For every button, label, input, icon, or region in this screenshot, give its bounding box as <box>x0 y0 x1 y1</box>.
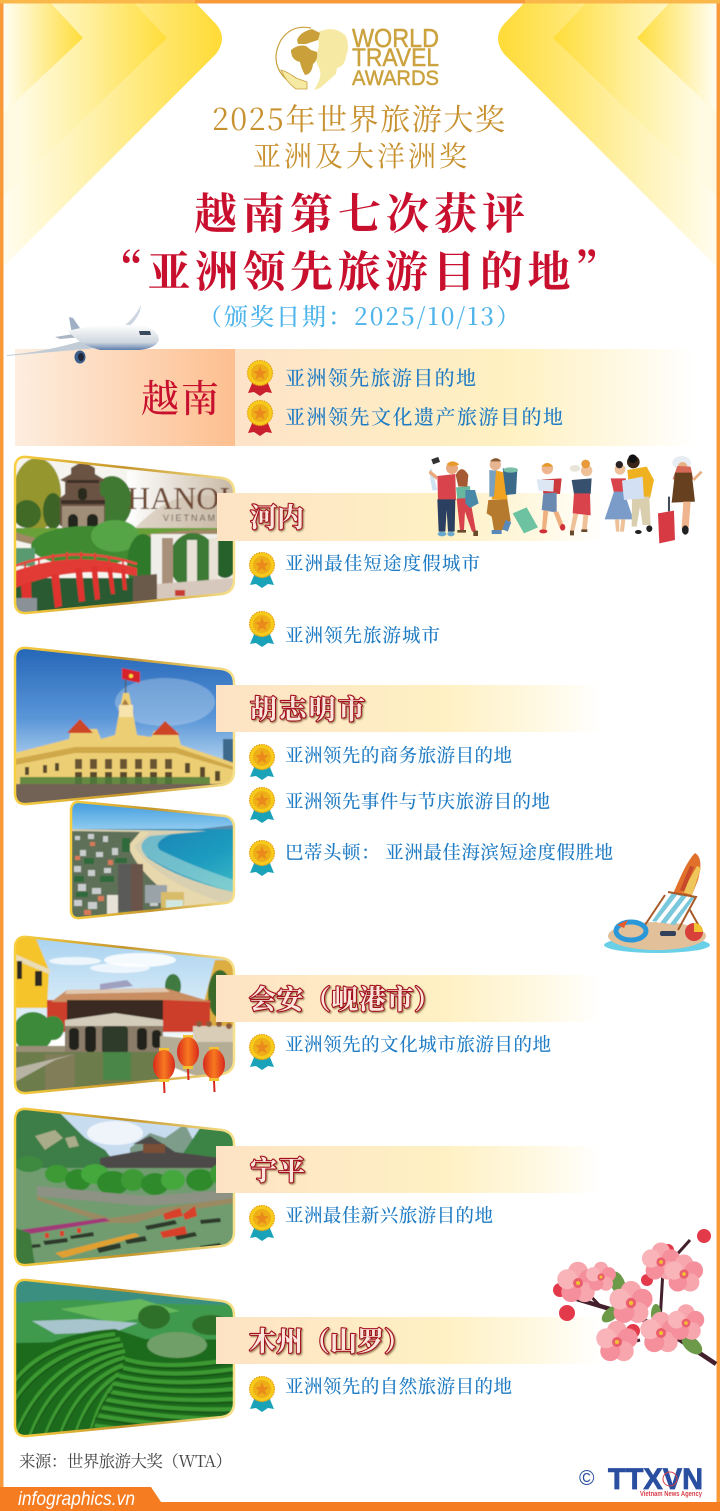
photo: Ninh Binh <box>15 1108 234 1266</box>
Vietnam label background <box>15 349 235 446</box>
Vietnam label: 越南 <box>141 368 219 423</box>
title line 1: 越南第七次获评 <box>194 181 525 242</box>
medal: red 2 <box>248 400 272 436</box>
logo: World Travel Awards: AWARDS <box>352 67 439 90</box>
title line 2: “亚洲领先旅游目的地” <box>100 239 618 300</box>
panel: Vietnam <box>15 349 695 446</box>
medal: red 1 <box>248 360 272 396</box>
medal: Hanoi 2 <box>250 612 274 647</box>
medal: Ninh Binh <box>250 1206 274 1241</box>
award: Hanoi 2: 亚洲领先旅游城市 <box>285 622 440 648</box>
illustration: beach chair and surfboard <box>604 853 710 953</box>
photo: Ho Chi Minh City Hall <box>15 647 234 806</box>
city name: Moc Chau (Son La): 木州（山罗） <box>249 1320 411 1359</box>
logo: TTXVN: TTXVN <box>608 1463 703 1496</box>
logo: World Travel Awards: TRAVEL <box>352 44 439 72</box>
award: Ninh Binh: 亚洲最佳新兴旅游目的地 <box>285 1202 493 1228</box>
footer bar <box>0 1487 720 1511</box>
photo: Hanoi: VIETNAM <box>163 513 217 523</box>
heading: award region: 亚洲及大洋洲奖 <box>253 135 467 175</box>
medal: HCMC 2 <box>250 788 274 823</box>
award: Moc Chau: 亚洲领先的自然旅游目的地 <box>285 1373 512 1399</box>
logo: TTXVN: © <box>579 1467 595 1490</box>
award: Hoi An: 亚洲领先的文化城市旅游目的地 <box>285 1031 551 1057</box>
decorative chevrons: top left <box>3 0 222 267</box>
city name: Ho Chi Minh City: 胡志明市 <box>250 688 365 727</box>
award date: （颁奖日期：2025/10/13） <box>198 297 520 332</box>
source note: 来源：世界旅游大奖（WTA） <box>19 1448 232 1472</box>
photo: Vung Tau beach <box>71 800 236 920</box>
icon: lanterns <box>153 1035 225 1093</box>
medal: Moc Chau <box>250 1376 274 1412</box>
photo: Moc Chau tea hills <box>10 1279 234 1449</box>
award: Asia's leading heritage destination: 亚洲领先文化遗产旅游目的地 <box>285 401 563 430</box>
city band: Ninh Binh <box>216 1146 601 1193</box>
city band: Ho Chi Minh City <box>216 685 601 732</box>
award: Vung Tau: 巴蒂头顿： 亚洲最佳海滨短途度假胜地 <box>285 839 613 865</box>
award: Hanoi 1: 亚洲最佳短途度假城市 <box>285 550 480 576</box>
medal: Vung Tau <box>250 840 274 876</box>
photo: Hanoi: HANOI <box>127 480 230 516</box>
illustration: group of tourists <box>429 454 702 543</box>
medal: Hoi An <box>250 1034 274 1070</box>
Vietnam awards background <box>235 349 695 446</box>
icon: airplane <box>7 305 159 364</box>
medal: Hanoi 1 <box>250 552 274 588</box>
award: HCMC 2: 亚洲领先事件与节庆旅游目的地 <box>285 788 550 814</box>
award: HCMC 1: 亚洲领先的商务旅游目的地 <box>285 742 512 768</box>
medal: HCMC 1 <box>250 744 274 780</box>
illustration: peach blossoms <box>553 1229 716 1364</box>
city band: Moc Chau <box>216 1317 601 1364</box>
city name: Ninh Binh: 宁平 <box>250 1149 305 1188</box>
city band: Hanoi <box>217 493 602 541</box>
photo: Hanoi <box>13 456 239 614</box>
city name: Hoi An (Da Nang): 会安（岘港市） <box>249 978 441 1017</box>
decorative chevrons: top right <box>498 0 717 267</box>
city name: Hanoi: 河内 <box>250 496 304 535</box>
award: Asia's leading destination: 亚洲领先旅游目的地 <box>285 362 476 391</box>
footer bar: infographics.vn <box>18 1489 135 1510</box>
photo: Hoi An bridge <box>13 936 234 1094</box>
heading: award name: 2025年世界旅游大奖 <box>212 95 505 139</box>
city band: Hoi An <box>216 975 601 1022</box>
logo: World Travel Awards: WORLD <box>352 23 439 53</box>
logo: World Travel Awards <box>276 23 439 90</box>
logo: TTXVN: Vietnam News Agency <box>640 1491 702 1498</box>
